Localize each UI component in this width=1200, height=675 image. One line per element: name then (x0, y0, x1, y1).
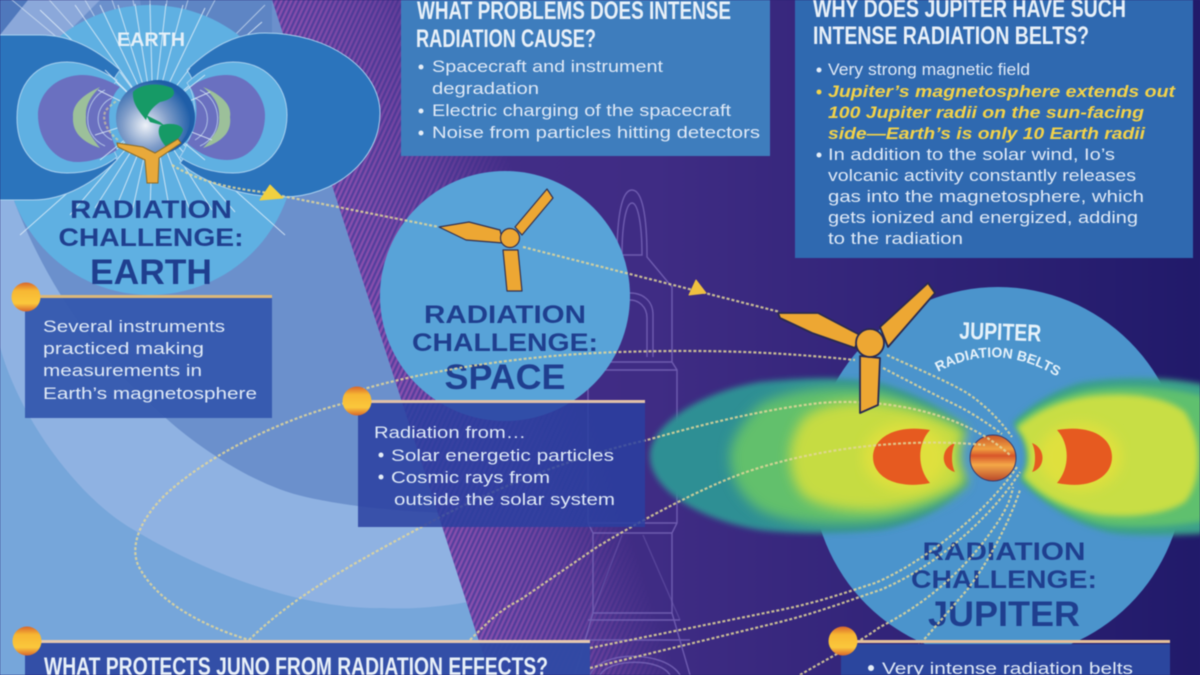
panel bullet list: Spacecraft and instrument (432, 58, 663, 76)
panel bullet list: In addition to the solar wind, Io’s (828, 146, 1115, 164)
heading: radiation challenge Space (412, 301, 598, 397)
panel: why does Jupiter have such intense radiation belts (795, 0, 1193, 258)
panel bullet list: Noise from particles hitting detectors (432, 124, 760, 142)
icon: spacecraft near Jupiter (778, 283, 935, 413)
icon: arrow on orbit near Jupiter (689, 280, 706, 295)
panel text: measurements in (43, 362, 202, 380)
panel bullet list: Electric charging of the spacecraft (432, 102, 731, 120)
panel text: Earth’s magnetosphere (43, 385, 257, 403)
icon: Earth globe (116, 80, 195, 155)
panel bullet list: 100 Jupiter radii on the sun-facing (828, 104, 1144, 122)
panel text: Several instruments (43, 318, 225, 336)
panel text: Radiation from… (374, 424, 526, 442)
panel bullet list: to the radiation (828, 230, 963, 248)
radiation belts label: RADIATION BELTS (934, 346, 1061, 376)
panel heading (813, 0, 1126, 50)
heading: radiation challenge Space: CHALLENGE: (412, 329, 598, 357)
panel bullet list: gas into the magnetosphere, which (828, 188, 1144, 206)
panel: what problems does intense radiation cause (401, 0, 770, 156)
icon: spacecraft in Space circle (439, 189, 553, 291)
circle: Space radiation challenge (380, 171, 630, 421)
panel text: Solar energetic particles (391, 447, 614, 465)
panel bullet list: degradation (432, 80, 539, 98)
circle: Earth radiation challenge (0, 0, 380, 295)
field lines behind lobes (0, 0, 265, 117)
panel: what protects Juno (12, 626, 590, 675)
panel bullet list (418, 58, 760, 142)
orbit paths (104, 100, 1020, 675)
heading: radiation challenge Jupiter: JUPITER (928, 595, 1080, 634)
heading: radiation challenge Earth (58, 196, 244, 292)
icon: Jupiter marker (828, 626, 858, 656)
heading: radiation challenge Space: RADIATION (424, 301, 586, 329)
magnetosphere lobes (0, 33, 380, 200)
heading: radiation challenge Jupiter (911, 538, 1097, 634)
panel heading (416, 0, 731, 53)
panel bullet list: volcanic activity constantly releases (828, 167, 1136, 185)
panel bullet list: Jupiter’s magnetosphere extends out (828, 83, 1177, 101)
panel bullet list (816, 61, 1177, 248)
heading: radiation challenge Jupiter: RADIATION (922, 538, 1086, 566)
panel heading: INTENSE RADIATION BELTS? (813, 22, 1089, 50)
panel: Jupiter radiation (828, 626, 1170, 675)
chart: Jupiter radiation belts (650, 378, 1200, 535)
circle: Jupiter radiation challenge (646, 286, 1200, 645)
Jupiter label: JUPITER (959, 318, 1042, 347)
panel bullet list: Very strong magnetic field (828, 61, 1030, 79)
icon: small spacecraft at Earth (117, 139, 181, 183)
Earth label: EARTH (117, 30, 185, 51)
panel: Space radiation (342, 386, 645, 527)
panel text (43, 318, 257, 403)
heading: radiation challenge Jupiter: CHALLENGE: (911, 566, 1097, 594)
heading: radiation challenge Space: SPACE (444, 358, 566, 397)
rocket outline (575, 190, 690, 675)
panel: Earth practice (12, 282, 272, 418)
heading: radiation challenge Earth: RADIATION (70, 196, 232, 224)
panel bullet list: side—Earth’s is only 10 Earth radii (828, 125, 1145, 143)
panel text (374, 424, 615, 509)
heading: radiation challenge Earth: EARTH (90, 253, 212, 292)
panel bullet list: gets ionized and energized, adding (828, 209, 1138, 227)
panel text: Cosmic rays from (391, 469, 550, 487)
icon: Jupiter planet (970, 435, 1016, 481)
panel text: practiced making (43, 340, 204, 358)
panel text: outside the solar system (394, 491, 615, 509)
panel heading: RADIATION CAUSE? (416, 25, 596, 53)
heading: radiation challenge Earth: CHALLENGE: (58, 224, 244, 252)
icon: Jupiter marker (12, 626, 42, 656)
icon: arrow on orbit near Earth (260, 185, 283, 200)
field lines through circle (20, 4, 285, 235)
panel text (868, 665, 874, 671)
icon: Jupiter marker (342, 386, 372, 416)
icon: Jupiter marker (12, 282, 40, 312)
